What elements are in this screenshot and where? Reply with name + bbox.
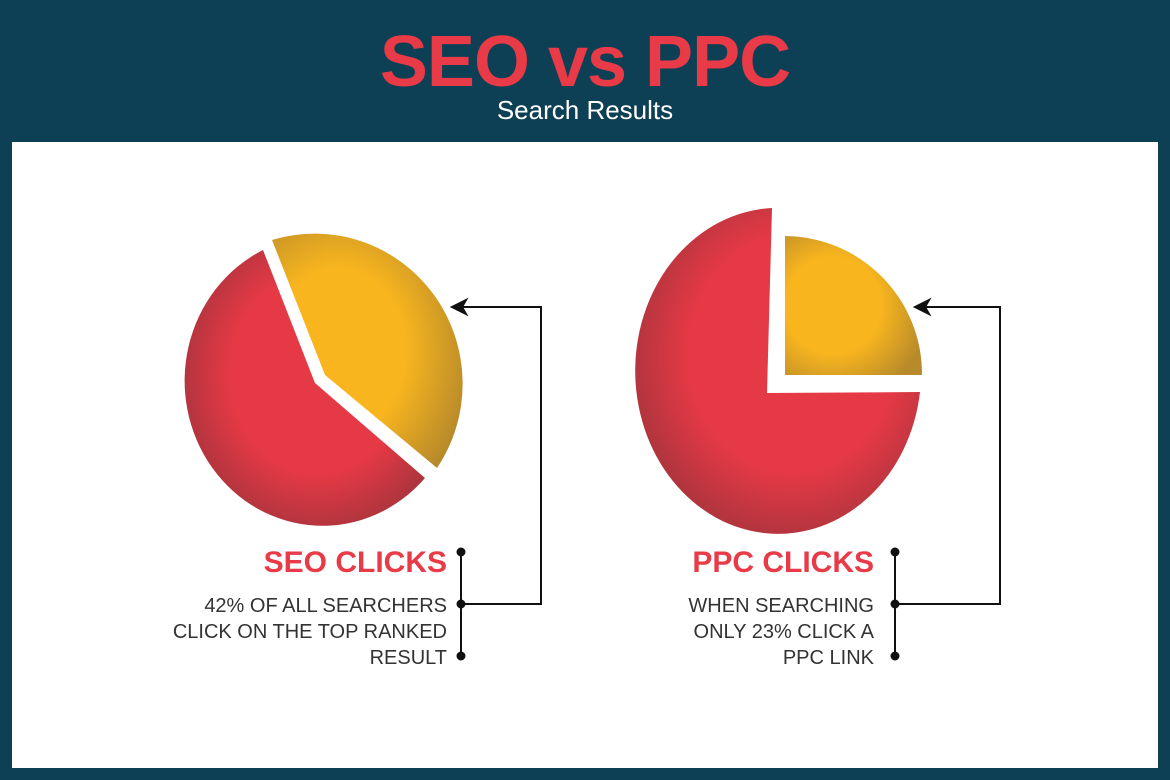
chart: SEO pie — [185, 234, 463, 526]
text: SEO clicks — [173, 546, 447, 669]
text: PPC clicks: WHEN SEARCHING — [688, 595, 874, 617]
title: SEO vs PPC — [380, 22, 790, 102]
text: PPC clicks — [688, 546, 875, 669]
text: PPC clicks: ONLY 23% CLICK A — [694, 621, 875, 643]
subtitle: Search Results — [497, 95, 673, 125]
panel: main white — [12, 142, 1158, 768]
chart: PPC pie — [635, 208, 922, 534]
text: PPC clicks: PPC CLICKS — [692, 546, 874, 579]
text: SEO clicks: SEO CLICKS — [264, 546, 447, 579]
text: PPC clicks: PPC LINK — [783, 647, 875, 669]
text: SEO clicks: RESULT — [370, 647, 447, 669]
text: SEO clicks: 42% OF ALL SEARCHERS — [204, 595, 447, 617]
arrow: SEO connector — [452, 300, 541, 660]
text: SEO clicks: CLICK ON THE TOP RANKED — [173, 621, 447, 643]
arrow: PPC connector — [892, 300, 1000, 660]
